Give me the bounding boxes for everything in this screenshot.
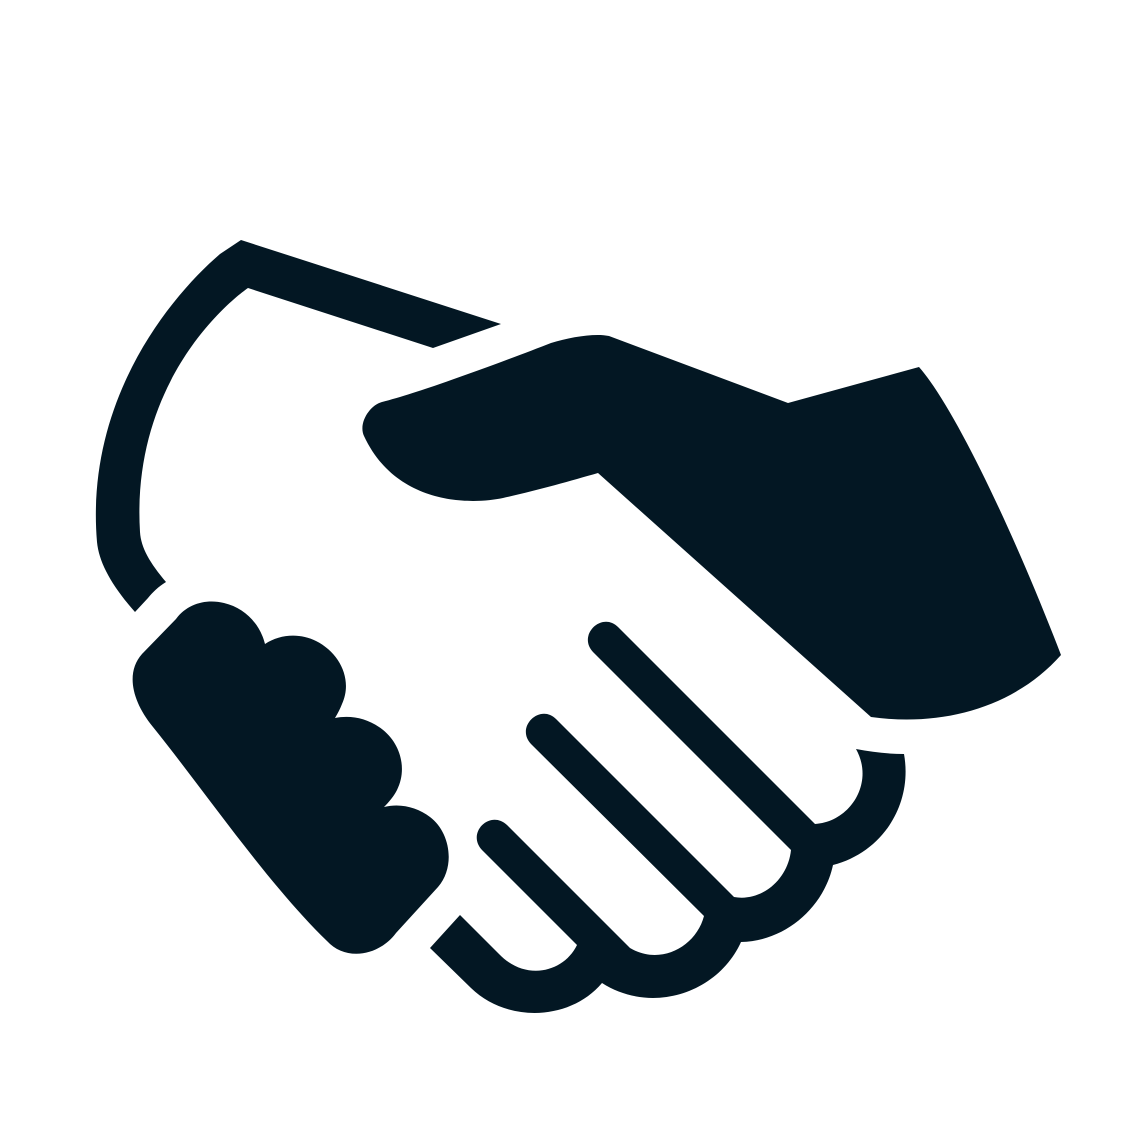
icon: handshake [96,240,1061,1013]
right hand and sleeve [362,335,1061,719]
left hand knuckles [133,602,449,954]
left cuff outline [96,240,501,612]
finger outlines [430,622,906,1013]
